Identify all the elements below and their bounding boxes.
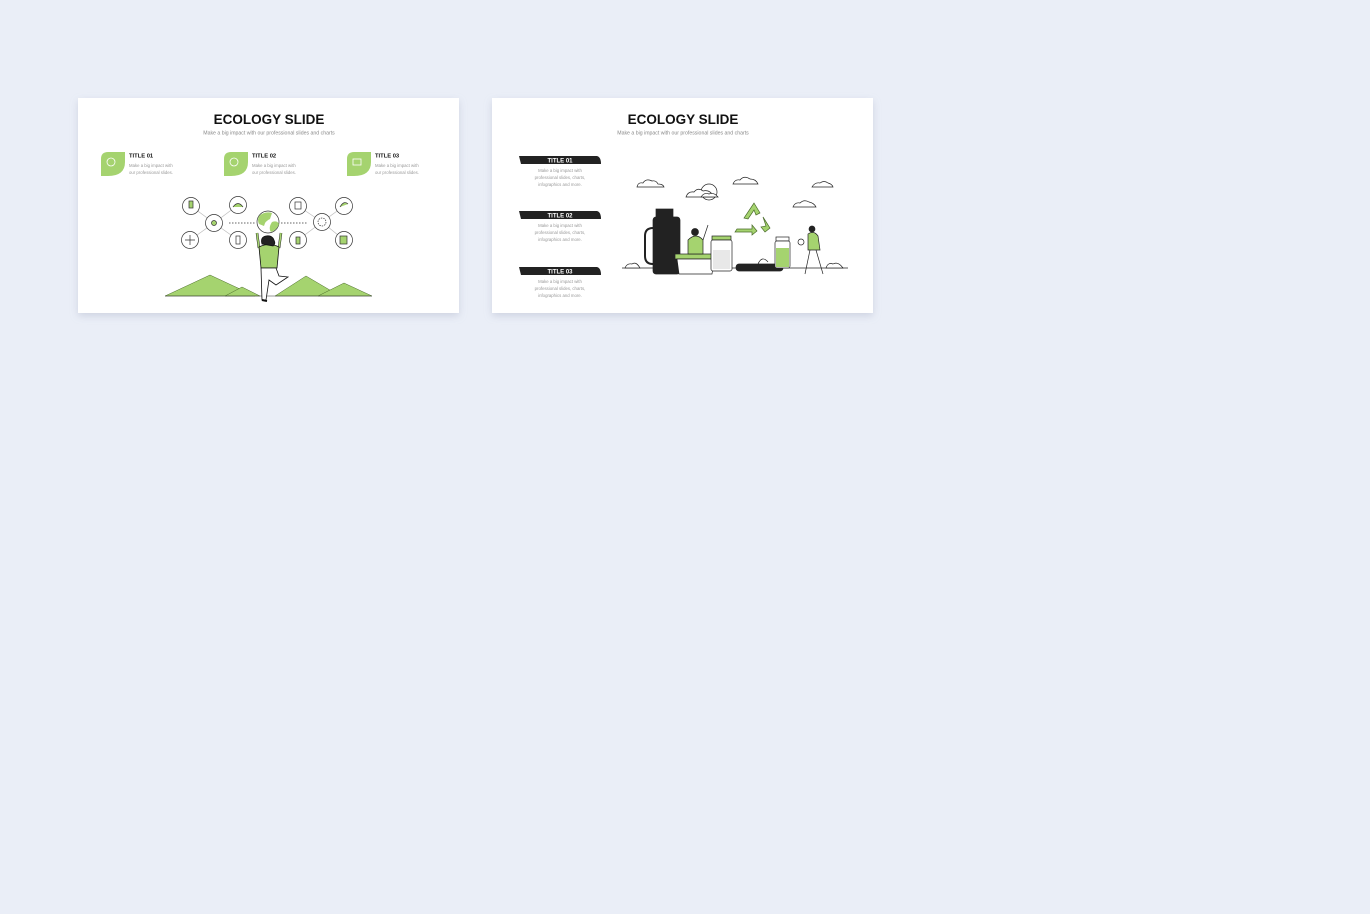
panel: slide 1	[78, 98, 459, 313]
subtitle: Make a big impact with our professional slides and charts	[203, 130, 335, 136]
item 3	[347, 152, 419, 176]
item 3: our professional slides.	[375, 170, 419, 175]
illustration	[622, 177, 848, 274]
item 1: Make a big impact with	[129, 163, 173, 168]
panel: slide 2	[492, 98, 873, 313]
icon network	[182, 196, 352, 248]
item 3: Make a big impact with	[375, 163, 419, 168]
item 1	[101, 152, 173, 176]
item 1: infographics and more.	[538, 182, 582, 187]
item 3: TITLE 03	[547, 270, 573, 276]
item 3	[519, 267, 601, 298]
item 1: Make a big impact with	[538, 168, 582, 173]
item 1: our professional slides.	[129, 170, 173, 175]
item 2	[224, 152, 296, 176]
title: ECOLOGY SLIDE	[214, 112, 324, 127]
item 3: professional slides, charts,	[535, 286, 585, 291]
item 2: TITLE 02	[547, 214, 573, 220]
item 1: TITLE 01	[129, 154, 154, 160]
mountains	[165, 275, 372, 296]
item 3: infographics and more.	[538, 293, 582, 298]
item 3: Make a big impact with	[538, 279, 582, 284]
icon: globe	[257, 211, 279, 233]
item 2	[519, 211, 601, 242]
item 2: infographics and more.	[538, 237, 582, 242]
item 2: Make a big impact with	[252, 163, 296, 168]
item 2: TITLE 02	[252, 154, 276, 160]
item 2: professional slides, charts,	[535, 230, 585, 235]
item 2: Make a big impact with	[538, 223, 582, 228]
person	[257, 233, 288, 301]
item 3: TITLE 03	[375, 154, 400, 160]
item 1: professional slides, charts,	[535, 175, 585, 180]
item 2: our professional slides.	[252, 170, 296, 175]
item 1: TITLE 01	[547, 158, 573, 164]
title: ECOLOGY SLIDE	[628, 112, 738, 127]
item 1	[519, 156, 601, 187]
subtitle: Make a big impact with our professional slides and charts	[617, 130, 749, 136]
